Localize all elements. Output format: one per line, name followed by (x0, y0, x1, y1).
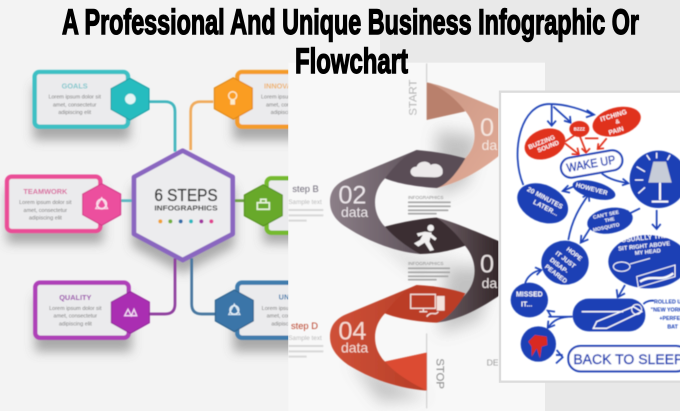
node: buzzing sound (524, 128, 566, 160)
card: unique (214, 280, 288, 340)
node: itching and pain: ITCHING (600, 109, 628, 124)
center hexagon: INFOGRAPHICS (154, 203, 218, 212)
node: however: HOWEVER (575, 182, 609, 197)
connectors (120, 102, 247, 314)
node: can't see the mosquito: THE (604, 216, 616, 224)
text block: infographics 1: INFOGRAPHICS (408, 195, 443, 200)
node: usually they sit right above my head: SIT RIGHT ABOVE (618, 241, 671, 253)
box shadows (0, 82, 288, 358)
card: green step (243, 175, 288, 236)
node: missed it: IT... (521, 302, 532, 309)
card: teamwork: TEAMWORK (23, 187, 68, 196)
card: quality: amet, consectetur (54, 314, 97, 320)
node: back to sleep (568, 346, 680, 371)
ribbon band 01 (427, 82, 500, 188)
node: 20 minutes later (516, 182, 569, 224)
card: teamwork: Lorem ipsum dolor sit (19, 200, 72, 206)
node: 20 minutes later: LATER... (532, 199, 559, 218)
text block: infographics 2: INFOGRAPHICS (408, 261, 443, 266)
centre divider (425, 63, 428, 408)
node: missed it: MISSED (516, 292, 543, 299)
card: quality: QUALITY (59, 293, 92, 302)
annotation: rolled new yorker (651, 299, 680, 330)
card: unique: adipiscing (271, 321, 296, 327)
node: squashed mosquito (521, 326, 556, 362)
card: innovation: INNOVATION (264, 82, 309, 91)
node: hope it just disappeared: IT JUST (554, 250, 577, 270)
ribbon band 03: 0 (480, 251, 494, 279)
node: hope it just disappeared: DISAP- (548, 257, 569, 275)
label: step D (288, 321, 323, 357)
ribbon shadows (350, 130, 493, 402)
card: teamwork: adipiscing elit (29, 216, 62, 222)
title (62, 3, 639, 81)
icon: runner (414, 225, 437, 251)
node: missed it (511, 283, 548, 317)
node: hope it just disappeared (541, 241, 589, 285)
card: innovation: Lorem ipsum (261, 95, 293, 101)
node: 20 minutes later: 20 MINUTES (526, 186, 564, 211)
panel: hand-drawn flowchart (500, 92, 680, 382)
card: innovation: amet, cons (266, 102, 293, 108)
card: unique: UNIQUE (279, 292, 307, 301)
card: goals (35, 72, 149, 127)
node: wake up (559, 149, 624, 179)
ribbon band 04: data (341, 340, 368, 356)
ribbon band 04: 04 (338, 317, 367, 345)
node: rolled newspaper (573, 299, 645, 331)
node: usually they sit right above my head (608, 232, 680, 288)
icon: cloud (411, 162, 443, 177)
annotation: rolled new yorker: BAT (667, 324, 679, 330)
card: innovation: adipiscing (271, 110, 295, 116)
center hexagon (134, 151, 233, 260)
card: goals: amet, consectetur (53, 102, 97, 108)
node: usually they sit right above my head: USUALLY THEY (621, 232, 672, 244)
node: wake up: WAKE UP (565, 153, 616, 175)
node: can't see the mosquito (586, 206, 634, 235)
red arrows (565, 133, 607, 155)
panel: ribbon infographic (288, 63, 545, 411)
panel: 6 steps hexagon infographic (0, 69, 288, 358)
card: teamwork (7, 177, 121, 231)
ribbon band 03 (385, 218, 500, 323)
arrows (518, 104, 661, 363)
icon: computer (411, 294, 444, 317)
label: step B: Sample text (288, 199, 322, 206)
card: goals: GOALS (62, 82, 88, 91)
node: itching and pain: & (615, 119, 621, 126)
card: quality: Lorem ipsum dolor sit (49, 306, 102, 312)
card: quality (35, 283, 149, 338)
node: hope it just disappeared: HOPE (565, 246, 583, 263)
label: step B (288, 184, 323, 221)
title: Flowchart (295, 42, 408, 81)
ribbon band 01: 0 (480, 114, 494, 142)
node: can't see the mosquito: CAN'T SEE (593, 209, 620, 221)
ribbon band 02 (330, 150, 465, 254)
card: unique: amet, cons (267, 314, 294, 320)
node: bzzz (569, 121, 589, 137)
card: goals: adipiscing elit (58, 110, 92, 116)
node: bzzz: BZZZ (574, 127, 585, 132)
label: step D: step D (291, 321, 318, 331)
node: itching and pain (592, 106, 642, 138)
node: hope it just disappeared: PEARED (543, 263, 569, 285)
node: however (572, 179, 616, 201)
ribbon band 02: 02 (338, 182, 367, 210)
node: itching and pain: PAIN (608, 126, 625, 137)
label: step D: Sample text (288, 335, 322, 342)
card: unique: Lorem ipsum (262, 306, 294, 312)
node: buzzing sound: BUZZING (527, 134, 556, 151)
text block: infographics 2 (408, 261, 450, 280)
node: can't see the mosquito: MOSQUITO (593, 222, 620, 234)
text block: infographics 1 (408, 195, 451, 214)
label: start: START (407, 79, 419, 116)
ribbon band 02: data (341, 204, 368, 220)
ribbon band 01: da (482, 137, 497, 153)
center hexagon: 6 STEPS (154, 185, 218, 205)
card: teamwork: amet, consectetur (24, 208, 67, 214)
ribbon band 04 (330, 285, 465, 391)
card: goals: Lorem ipsum dolor sit (48, 95, 101, 101)
node: buzzing sound: SOUND (536, 139, 561, 155)
ribbon band 03: da (482, 275, 497, 291)
card: quality: adipiscing elit (59, 321, 92, 327)
card: innovation (213, 69, 288, 130)
label: stop: STOP (434, 358, 446, 389)
label: step B: step B (292, 184, 319, 194)
node: lamp (630, 151, 680, 208)
label: DE: DE (487, 358, 499, 368)
node: usually they sit right above my head: MY HEAD (635, 248, 661, 257)
